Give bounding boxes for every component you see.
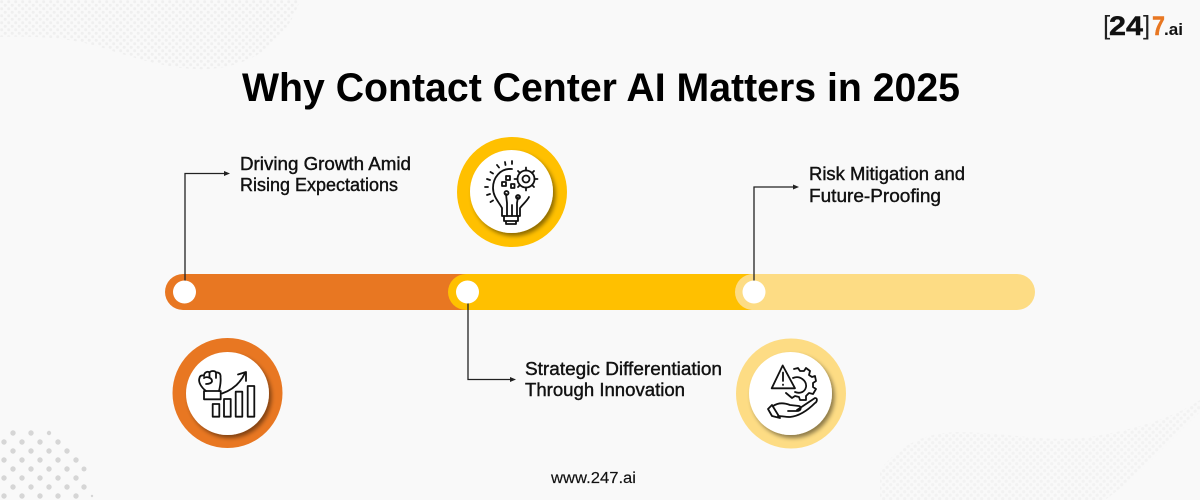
icon: light bulb with gear	[485, 161, 538, 224]
label: differentiation: Strategic Differentiation	[525, 359, 722, 379]
label: growth: Driving Growth Amid	[240, 154, 411, 174]
label: risk: Risk Mitigation and	[809, 164, 965, 184]
label: risk	[809, 164, 965, 206]
icon: warning, gear and hand	[768, 366, 817, 418]
decorative dot grid: bottom left	[1, 430, 93, 499]
logo: [24]7.ai: ]	[1143, 10, 1150, 40]
timeline node 3	[742, 280, 766, 304]
logo: [24]7.ai: .ai	[1164, 20, 1183, 39]
timeline node 2	[456, 280, 479, 304]
icon badge: growth	[172, 338, 282, 448]
logo: [24]7.ai: [	[1103, 10, 1111, 40]
title: Why Contact Center AI Matters in 2025	[242, 66, 960, 110]
connector arrow: growth	[185, 171, 230, 285]
connector arrow: differentiation	[468, 300, 516, 382]
decorative dotted wave: top left	[0, 0, 300, 69]
label: differentiation: Through Innovation	[525, 380, 685, 400]
decorative dotted wave: bottom right	[880, 400, 1200, 500]
timeline node 1	[173, 280, 196, 304]
label: risk: Future-Proofing	[809, 186, 941, 206]
label: growth: Rising Expectations	[240, 175, 398, 195]
logo: [24]7.ai: 7	[1152, 11, 1165, 41]
logo: [24]7.ai	[1103, 10, 1183, 41]
icon: fist and rising bars	[199, 371, 254, 417]
label: differentiation	[525, 359, 722, 400]
label: growth	[240, 154, 411, 195]
website url: www.247.ai	[550, 470, 636, 487]
logo: [24]7.ai: 24	[1109, 11, 1143, 41]
timeline bar	[165, 274, 1035, 310]
icon badge: innovation	[457, 137, 567, 247]
icon badge: risk	[736, 338, 846, 448]
connector arrow: risk	[754, 184, 799, 285]
